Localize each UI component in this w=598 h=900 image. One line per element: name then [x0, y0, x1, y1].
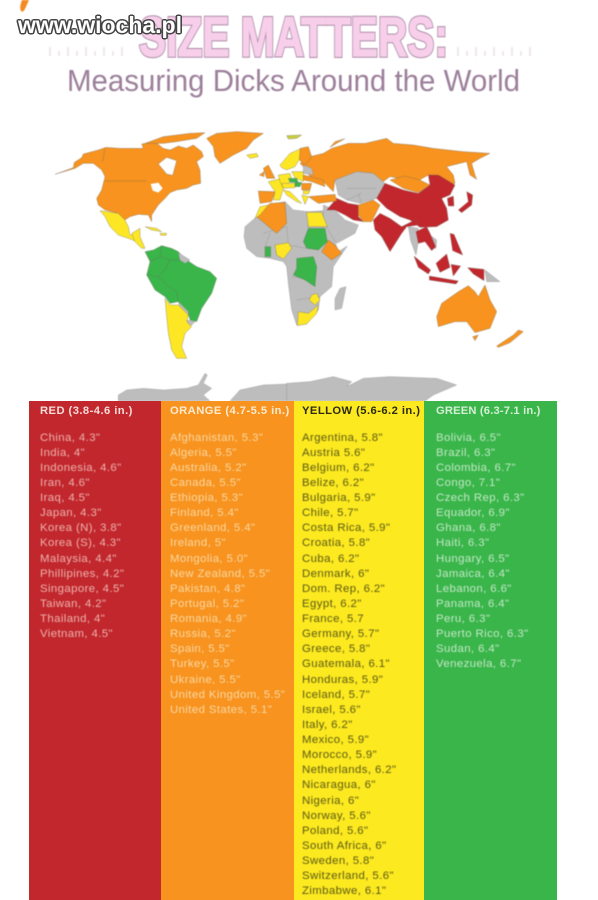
Australia and New Zealand [437, 285, 523, 347]
list: yellow countries: Morocco, 5.9" [302, 749, 377, 761]
list: green countries: Congo, 7.1" [436, 477, 500, 489]
list: orange countries: Mongolia, 5.0" [170, 552, 248, 564]
list: yellow countries: Honduras, 5.9" [302, 674, 383, 686]
list: red countries: Phillipines, 4.2" [40, 568, 124, 580]
heading: green: GREEN (6.3-7.1 in.) [436, 404, 541, 416]
list: yellow countries: Nicaragua, 6" [302, 779, 376, 791]
list: yellow countries: Israel, 5.6" [302, 704, 361, 716]
South America green [145, 246, 217, 322]
list: yellow countries: Cuba, 6.2" [302, 552, 359, 564]
list: green countries: Equador, 6.9" [436, 507, 510, 519]
panel: red [29, 401, 161, 900]
list: green countries: Czech Rep, 6.3" [436, 492, 525, 504]
list: orange countries: United Kingdom, 5.5" [170, 689, 285, 701]
heading: SIZE MATTERS: [139, 5, 448, 68]
list: red countries [40, 432, 124, 640]
list: red countries: Indonesia, 4.6" [40, 462, 122, 474]
list: green countries: Panama, 6.4" [436, 598, 509, 610]
list: yellow countries: Zimbabwe, 6.1" [302, 885, 386, 897]
list: orange countries: Canada, 5.5" [170, 477, 241, 489]
list: green countries: Venezuela, 6.7" [436, 658, 521, 670]
list: orange countries: Romania, 4.9" [170, 613, 247, 625]
list: red countries: Vietnam, 4.5" [40, 628, 113, 640]
world map [54, 130, 524, 401]
title block [49, 5, 531, 98]
ruler ticks [50, 47, 530, 56]
list: yellow countries: Austria 5.6" [302, 447, 365, 459]
map: Americas and western Africa [55, 132, 347, 401]
panel: green [424, 401, 557, 900]
heading: SIZE MATTERS: [139, 5, 448, 68]
list: red countries: India, 4" [40, 447, 85, 459]
list: orange countries: Ethiopia, 5.3" [170, 492, 243, 504]
list: yellow countries: Dom. Rep, 6.2" [302, 583, 385, 595]
list: red countries: Singapore, 4.5" [40, 583, 124, 595]
Africa base [244, 202, 347, 325]
list: yellow countries: South Africa, 6" [302, 840, 387, 852]
list: red countries: China, 4.3" [40, 432, 100, 444]
Afghanistan and Pakistan [358, 200, 380, 222]
list: green countries: Haiti, 6.3" [436, 537, 489, 549]
Argentina and Chile [165, 298, 192, 358]
list: orange countries: Portugal, 5.2" [170, 598, 244, 610]
list: orange countries: Turkey, 5.5" [170, 658, 235, 670]
list: orange countries [170, 432, 285, 716]
list: yellow countries: Guatemala, 6.1" [302, 658, 390, 670]
Antarctica east [287, 377, 457, 401]
list: yellow countries: Netherlands, 6.2" [302, 764, 396, 776]
Mexico and Central America [100, 211, 167, 248]
list: red countries: Malaysia, 4.4" [40, 552, 117, 564]
map: Europe and Mediterranean [247, 135, 337, 233]
list: yellow countries: Switzerland, 5.6" [302, 870, 394, 882]
Hudson Bay [158, 157, 177, 175]
list: green countries [436, 432, 529, 670]
list: yellow countries: Mexico, 5.9" [302, 734, 369, 746]
list: orange countries: Finland, 5.4" [170, 507, 239, 519]
list: orange countries: Greenland, 5.4" [170, 522, 255, 534]
Antarctica west [118, 373, 302, 401]
list: yellow countries: Costa Rica, 5.9" [302, 522, 390, 534]
list: yellow countries: Germany, 5.7" [302, 628, 379, 640]
list: orange countries: Algeria, 5.5" [170, 447, 237, 459]
list: yellow countries: Sweden, 5.8" [302, 855, 374, 867]
icon: orange corner mark [19, 0, 30, 12]
list: green countries: Bolivia, 6.5" [436, 432, 501, 444]
list: green countries: Puerto Rico, 6.3" [436, 628, 529, 640]
list: orange countries: United States, 5.1" [170, 704, 272, 716]
great lakes [151, 183, 163, 193]
list: green countries: Jamaica, 6.4" [436, 568, 510, 580]
list: red countries: Iran, 4.6" [40, 477, 90, 489]
list: yellow countries: Belize, 6.2" [302, 477, 364, 489]
list: red countries: Iraq, 4.5" [40, 492, 90, 504]
panel: orange [161, 401, 294, 900]
list: orange countries: Ireland, 5" [170, 537, 226, 549]
list: green countries: Ghana, 6.8" [436, 522, 501, 534]
list: red countries: Japan, 4.3" [40, 507, 102, 519]
list: green countries: Hungary, 6.5" [436, 552, 510, 564]
list: red countries: Thailand, 4" [40, 613, 105, 625]
list: orange countries: Ukraine, 5.5" [170, 674, 241, 686]
North America [55, 132, 263, 222]
red countries of Asia [327, 175, 484, 284]
list: yellow countries: Greece, 5.8" [302, 643, 370, 655]
list: yellow countries: Italy, 6.2" [302, 719, 353, 731]
list: green countries: Brazil, 6.3" [436, 447, 496, 459]
watermark: www.wiocha.pl [18, 12, 182, 38]
list: yellow countries: Chile, 5.7" [302, 507, 359, 519]
list: yellow countries: Croatia, 5.8" [302, 537, 370, 549]
list: yellow countries: Norway, 5.6" [302, 810, 371, 822]
panel: yellow [294, 401, 424, 900]
list: orange countries: New Zealand, 5.5" [170, 568, 270, 580]
list: yellow countries: Poland, 5.6" [302, 825, 368, 837]
list: red countries: Korea (N), 3.8" [40, 522, 122, 534]
Ghana and Nigeria [265, 247, 271, 257]
list: orange countries: Russia, 5.2" [170, 628, 236, 640]
Mongolia [390, 176, 430, 193]
list: green countries: Peru, 6.3" [436, 613, 490, 625]
list: yellow countries: Nigeria, 6" [302, 794, 359, 806]
list: orange countries: Pakistan, 4.8" [170, 583, 246, 595]
Guianas, Paraguay, Uruguay [178, 253, 195, 327]
list: yellow countries: Belgium, 6.2" [302, 462, 375, 474]
heading: orange: ORANGE (4.7-5.5 in.) [170, 404, 290, 416]
list: green countries: Sudan, 6.4" [436, 643, 500, 655]
list: yellow countries: France, 5.7 [302, 613, 364, 625]
heading: yellow: YELLOW (5.6-6.2 in.) [302, 404, 420, 416]
list: red countries: Korea (S), 4.3" [40, 537, 121, 549]
list: yellow countries [302, 432, 396, 897]
central Asia and Arabia grey [323, 172, 500, 310]
list: yellow countries: Argentina, 5.8" [302, 432, 383, 444]
list: yellow countries: Denmark, 6" [302, 568, 369, 580]
list: orange countries: Afghanistan, 5.3" [170, 432, 263, 444]
map: Eurasia, east Africa and Oceania [287, 138, 523, 401]
list: yellow countries: Bulgaria, 5.9" [302, 492, 376, 504]
east Africa colours [303, 228, 327, 250]
list: orange countries: Australia, 5.2" [170, 462, 247, 474]
Russia [300, 138, 490, 192]
list: green countries: Colombia, 6.7" [436, 462, 516, 474]
list: orange countries: Spain, 5.5" [170, 643, 230, 655]
list: green countries: Lebanon, 6.6" [436, 583, 512, 595]
list: yellow countries: Iceland, 5.7" [302, 689, 370, 701]
heading: red: RED (3.8-4.6 in.) [40, 404, 133, 416]
subtitle: Measuring Dicks Around the World [67, 63, 520, 98]
list: yellow countries: Egypt, 6.2" [302, 598, 362, 610]
list: red countries: Taiwan, 4.2" [40, 598, 106, 610]
